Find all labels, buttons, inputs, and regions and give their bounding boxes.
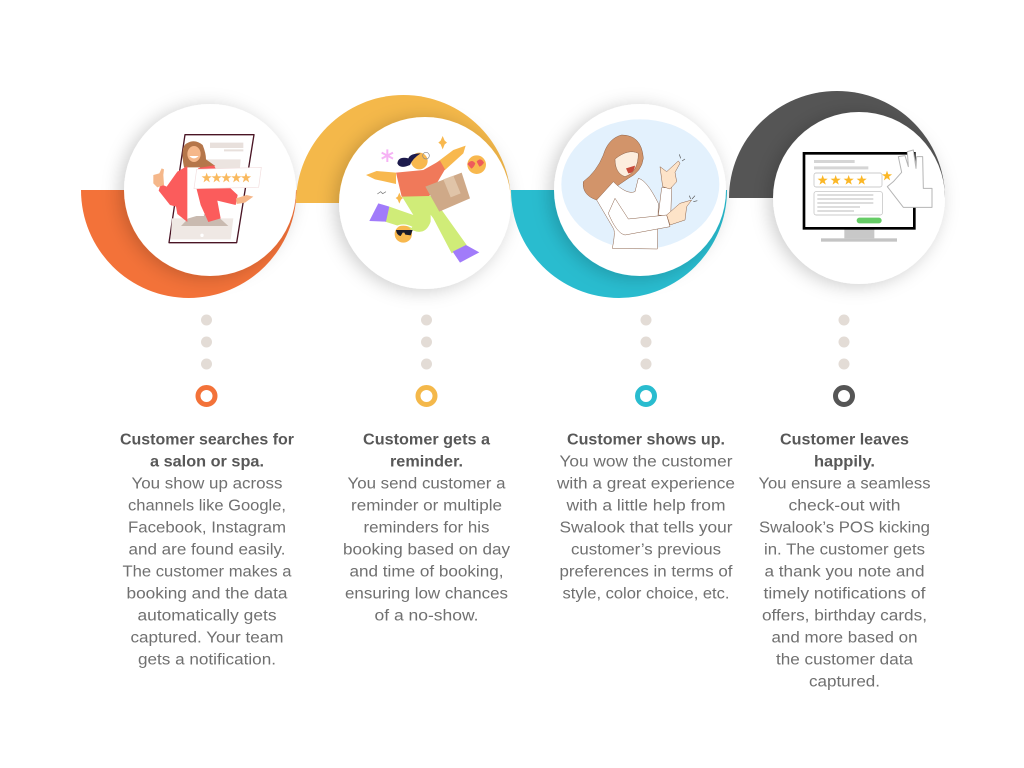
text block: step 1: gets a notification.: [138, 652, 276, 668]
white circle: [124, 104, 296, 276]
panel: step 1 graphic: [81, 104, 296, 298]
text block: step 3: Swalook that tells your: [560, 520, 732, 536]
text block: step 4: Swalook’s POS kicking: [759, 520, 930, 536]
text block: step 2: reminder or multiple: [351, 498, 502, 514]
icon: woman pointing: [561, 119, 719, 249]
text block: step 3: Customer shows up.: [567, 432, 725, 448]
text block: step 2: ensuring low chances: [345, 586, 508, 602]
text block: step 3: with a little help from: [565, 498, 726, 514]
panel: step 2 graphic: [296, 95, 511, 289]
orange half disc: [81, 190, 296, 298]
text block: step 1: Facebook, Instagram: [128, 520, 286, 536]
text block: step 2: You send customer a: [348, 476, 506, 492]
text block: step 3: style, color choice, etc.: [562, 586, 730, 602]
text block: step 1: booking and the data: [126, 586, 288, 602]
text block: step 2: Customer gets a: [363, 432, 490, 448]
white circle: [773, 112, 945, 284]
yellow half disc: [296, 95, 511, 203]
panel: step 3 graphic: [511, 104, 727, 298]
white circle: [554, 104, 726, 276]
text block: step 1: Customer searches for: [120, 432, 294, 448]
text block: step 1: and are found easily.: [128, 542, 286, 558]
text block: step 4: check-out with: [788, 498, 900, 514]
text block: step 4: in. The customer gets: [764, 542, 925, 558]
text block: step 3: customer’s previous: [571, 542, 721, 558]
connector: step 1 dots and ring: [198, 314, 215, 404]
icon: monitor with star review: [804, 150, 932, 242]
text block: step 4: Customer leaves: [780, 432, 909, 448]
text block: step 1: You show up across: [132, 476, 283, 492]
text block: step 4: timely notifications of: [764, 586, 926, 602]
text block: step 2: reminder.: [390, 454, 463, 470]
connector: step 2 dots and ring: [418, 314, 435, 404]
text block: step 3: preferences in terms of: [560, 564, 733, 580]
text block: step 4: happily.: [814, 454, 875, 470]
text block: step 4: a thank you note and: [764, 564, 924, 580]
text block: step 1: a salon or spa.: [150, 454, 264, 470]
text block: step 3: with a great experience: [556, 476, 735, 492]
text block: step 2: of a no-show.: [374, 608, 478, 624]
text block: step 1: The customer makes a: [122, 564, 292, 580]
white circle: [339, 117, 511, 289]
icon: running person with parcel: [366, 136, 486, 263]
icon: woman in phone giving rating: [153, 135, 261, 243]
text block: step 4: and more based on: [772, 630, 918, 646]
text block: step 2: [343, 432, 510, 624]
connector: step 3 dots and ring: [638, 314, 654, 404]
text block: step 2: reminders for his: [364, 520, 490, 536]
text block: step 4: You ensure a seamless: [758, 476, 931, 492]
text block: step 4: offers, birthday cards,: [762, 608, 927, 624]
text block: step 1: captured. Your team: [130, 630, 284, 646]
text block: step 4: captured.: [809, 674, 880, 690]
text block: step 1: [120, 432, 294, 668]
text block: step 1: automatically gets: [138, 608, 277, 624]
text block: step 3: You wow the customer: [560, 454, 732, 470]
text block: step 4: [758, 432, 931, 690]
text block: step 2: and time of booking,: [350, 564, 504, 580]
text block: step 2: booking based on day: [343, 542, 510, 558]
panel: step 4 graphic: [729, 91, 945, 284]
text block: step 3: [556, 432, 735, 602]
dark half disc: [729, 91, 945, 198]
text block: step 1: channels like Google,: [128, 498, 286, 514]
connector: step 4 dots and ring: [836, 314, 852, 404]
teal half disc: [511, 190, 727, 298]
text block: step 4: the customer data: [776, 652, 913, 668]
